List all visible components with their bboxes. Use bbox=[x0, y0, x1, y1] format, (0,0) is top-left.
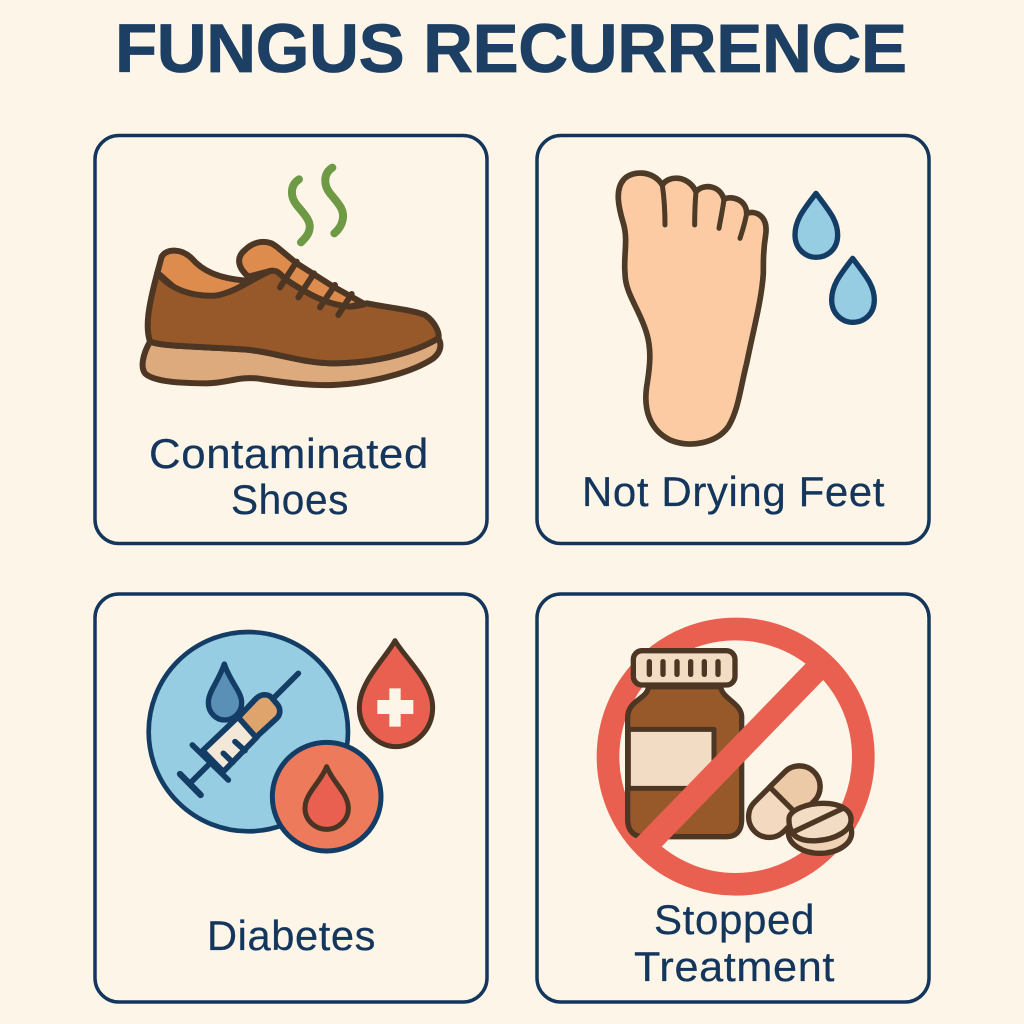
shoe upper bbox=[148, 271, 439, 363]
icon: diabetes bbox=[149, 632, 433, 851]
orange circle bbox=[272, 742, 381, 851]
water drop upper bbox=[795, 193, 838, 257]
panel: stopped treatment bbox=[537, 594, 929, 1002]
label: diabetes: Diabetes bbox=[207, 912, 376, 959]
label: stopped treatment: Treatment bbox=[634, 943, 835, 990]
syringe bbox=[180, 673, 298, 795]
label: not drying feet: Not Drying Feet bbox=[582, 468, 885, 515]
insulin drop bbox=[208, 664, 242, 720]
small blood drop bbox=[305, 767, 348, 829]
prohibition ring bbox=[608, 629, 863, 884]
cross bbox=[377, 688, 413, 727]
cap ridges bbox=[649, 662, 718, 674]
prohibition bar bbox=[642, 663, 823, 850]
blood drop with cross bbox=[359, 641, 433, 747]
icon: wet foot bbox=[618, 173, 874, 444]
panel: not drying feet bbox=[537, 136, 929, 544]
water drop lower bbox=[832, 258, 874, 322]
stink lines bbox=[292, 168, 343, 242]
label: stopped treatment: Stopped bbox=[654, 896, 815, 943]
tablet bbox=[788, 803, 852, 853]
toe lines bbox=[662, 185, 747, 238]
icon: no medication bbox=[608, 629, 863, 884]
bottle label bbox=[628, 729, 714, 788]
label: contaminated shoes: Contaminated bbox=[149, 430, 429, 477]
shoe sole bbox=[143, 338, 440, 385]
bottle cap bbox=[633, 651, 735, 685]
panel: contaminated shoes bbox=[95, 136, 487, 544]
label: contaminated shoes: Shoes bbox=[231, 476, 349, 523]
bottle body bbox=[628, 687, 742, 837]
label: stopped treatment bbox=[634, 896, 835, 990]
label: contaminated shoes bbox=[149, 430, 429, 523]
foot bbox=[618, 173, 766, 444]
capsule bbox=[740, 757, 829, 846]
title: FUNGUS RECURRENCE bbox=[115, 10, 907, 87]
panel: diabetes bbox=[95, 594, 487, 1002]
heel lining bbox=[157, 251, 247, 298]
blue circle bbox=[149, 632, 348, 831]
icon: smelly shoe bbox=[143, 168, 440, 385]
tongue bbox=[239, 242, 363, 307]
laces bbox=[280, 262, 352, 315]
